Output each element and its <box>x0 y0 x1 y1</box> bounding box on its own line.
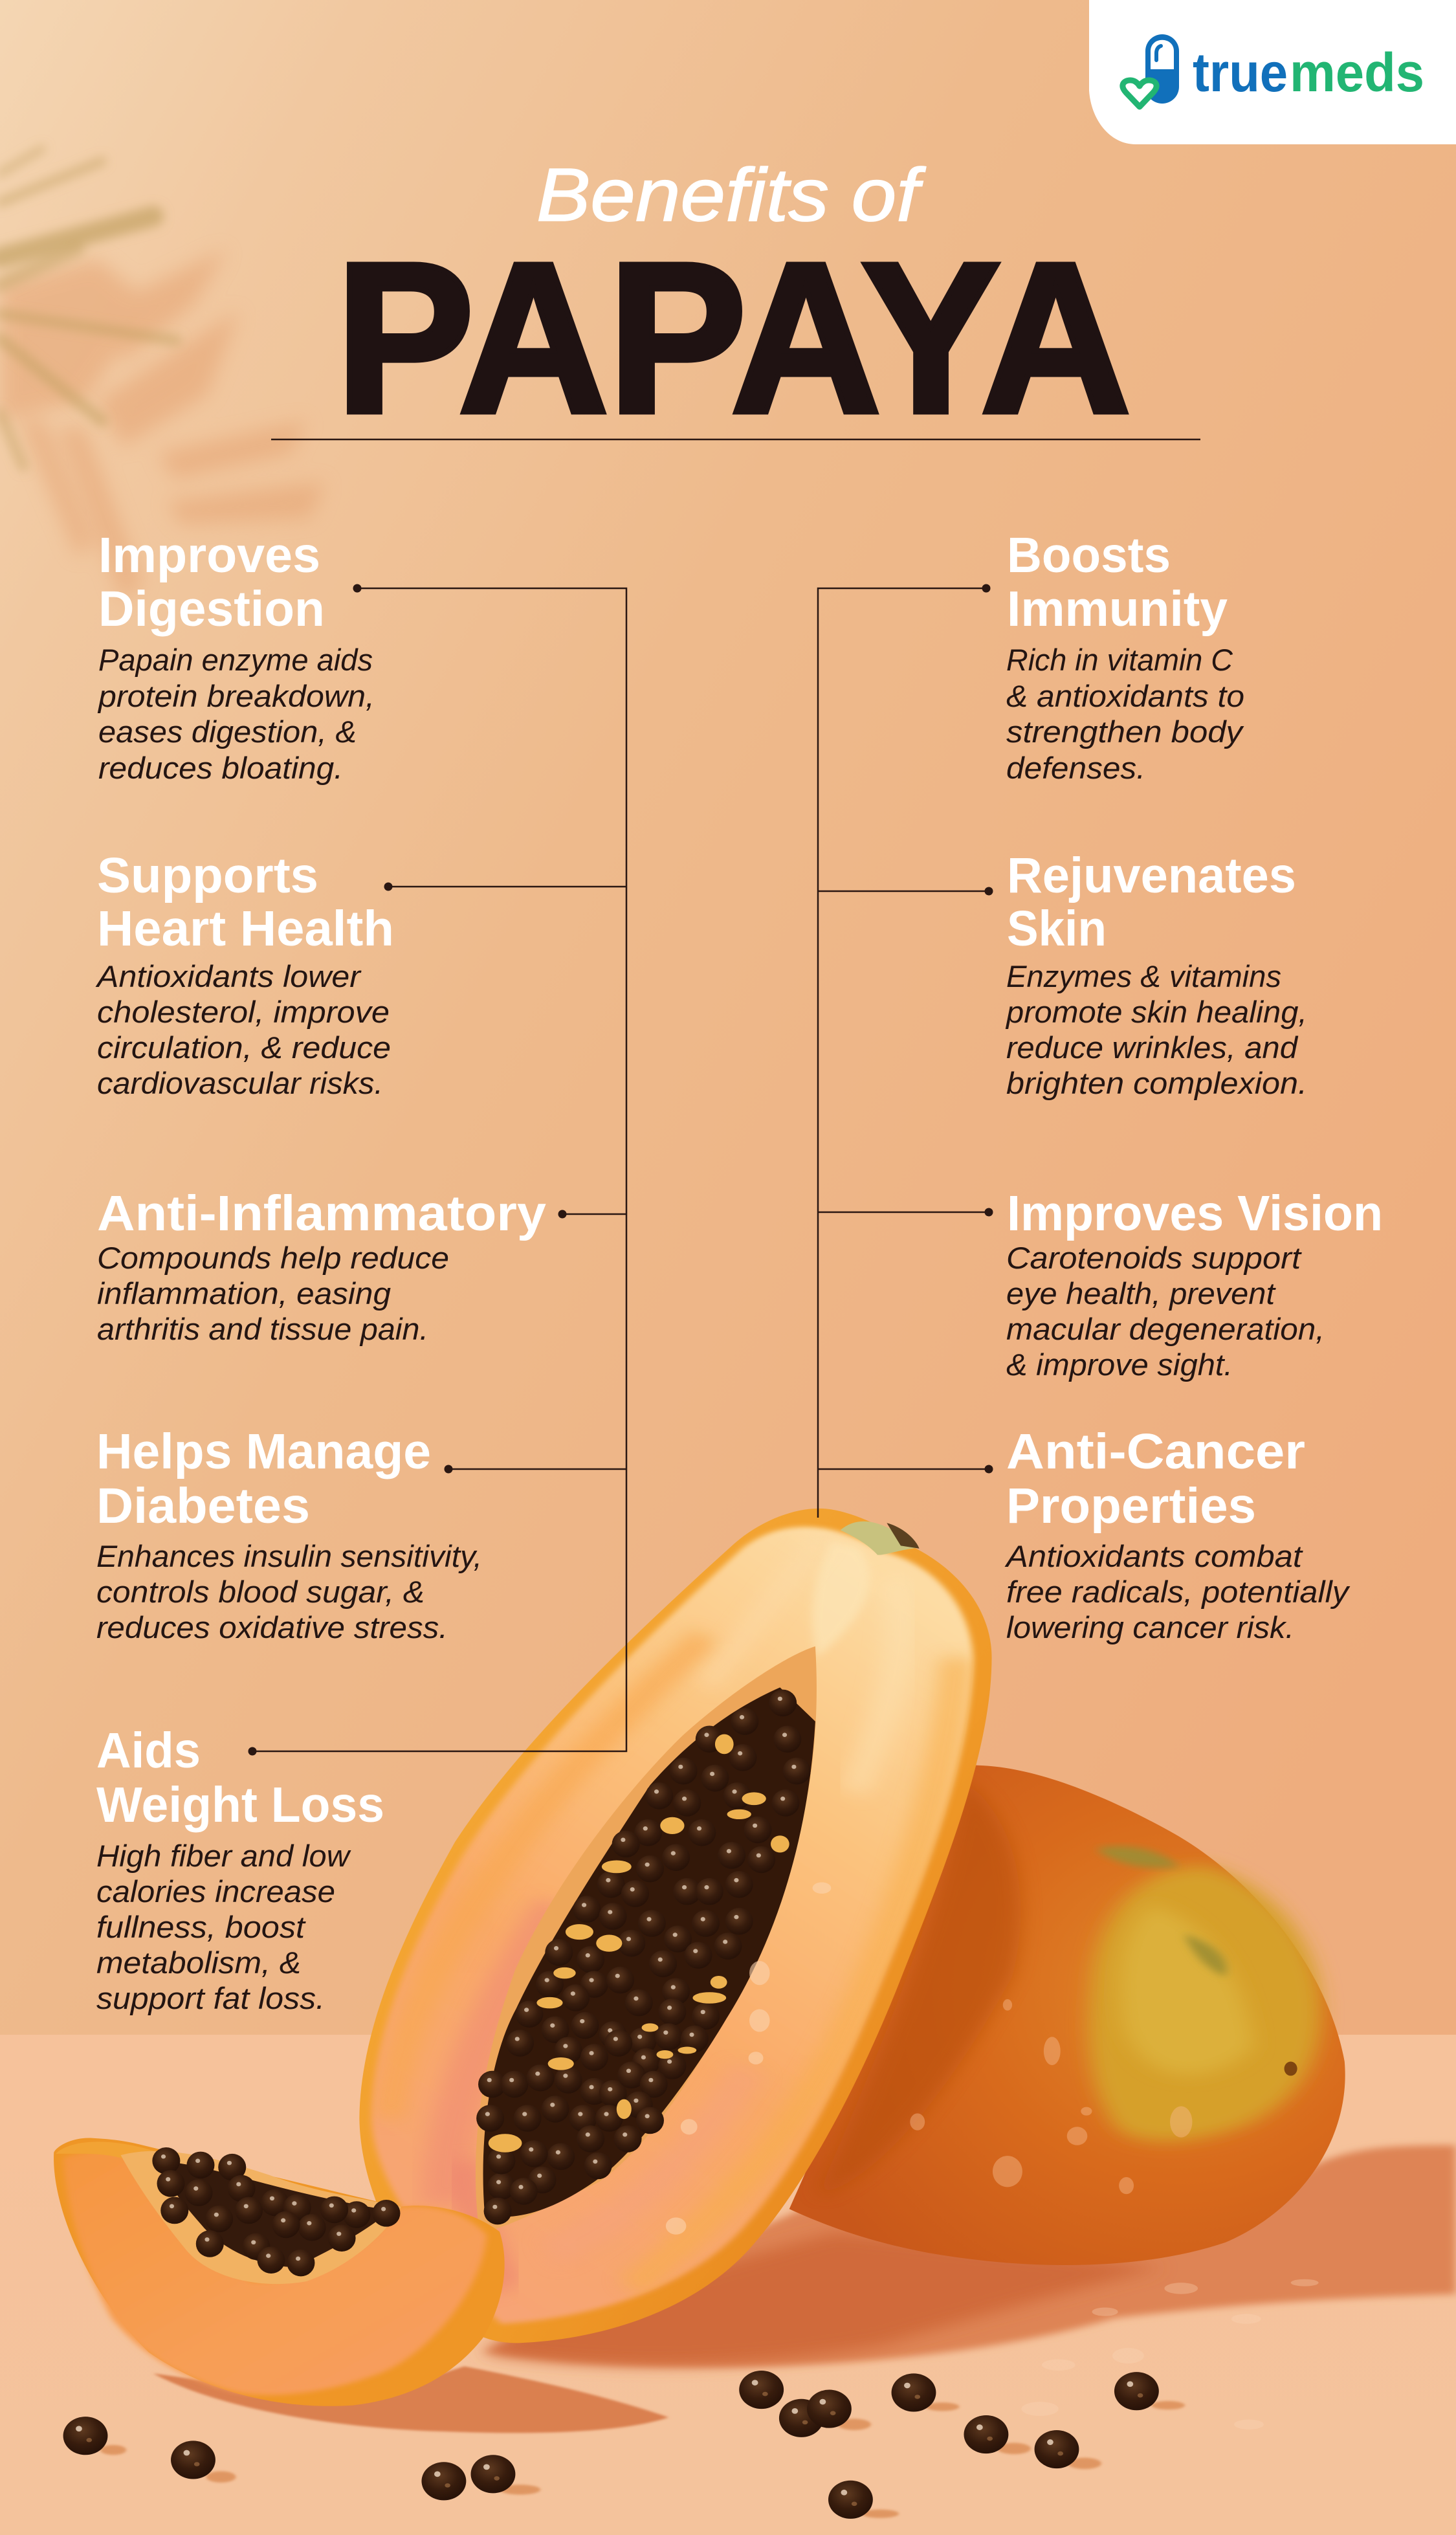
connector lines: right <box>818 584 993 1518</box>
logo wordmark: true <box>1193 42 1288 103</box>
benefit: rejuvenates skin: Rejuvenates <box>1007 848 1296 903</box>
logo wordmark: meds <box>1290 42 1424 103</box>
benefit: boosts immunity: & antioxidants to <box>1006 679 1244 713</box>
logo wordmark <box>1193 42 1424 103</box>
benefit: boosts immunity: Boosts <box>1007 527 1171 583</box>
benefit: anti-cancer properties: lowering cancer risk. <box>1006 1610 1294 1644</box>
yellow pulp pieces <box>489 1734 789 2153</box>
benefit: improves digestion: eases digestion, & <box>98 714 357 749</box>
benefit: improves vision: Carotenoids support <box>1006 1241 1302 1275</box>
flesh droplets <box>666 1882 831 2235</box>
benefit: improves vision: Improves Vision <box>1007 1186 1383 1241</box>
benefit: aids weight loss: support fat loss. <box>96 1981 325 2015</box>
benefit: helps manage diabetes <box>96 1424 482 1644</box>
papaya slice <box>54 2138 505 2406</box>
benefit: improves vision: macular degeneration, <box>1006 1312 1325 1346</box>
benefit: improves vision: & improve sight. <box>1006 1347 1233 1382</box>
benefit: anti-cancer properties: Antioxidants combat <box>1004 1539 1303 1573</box>
benefit: improves vision <box>1006 1186 1383 1382</box>
benefit: rejuvenates skin: promote skin healing, <box>1005 995 1307 1029</box>
benefit: supports heart health <box>95 848 394 1100</box>
benefit: rejuvenates skin: Enzymes & vitamins <box>1006 959 1281 993</box>
benefit: improves digestion: Digestion <box>98 581 325 637</box>
benefit: anti-cancer properties: free radicals, potentially <box>1006 1575 1351 1609</box>
fruit stem <box>841 1522 918 1555</box>
benefit: anti-cancer properties: Anti-Cancer <box>1006 1424 1305 1479</box>
benefit: rejuvenates skin: reduce wrinkles, and <box>1006 1030 1299 1065</box>
benefit: improves digestion <box>97 527 375 785</box>
flesh shading <box>390 1537 956 2288</box>
benefit: improves vision: eye health, prevent <box>1006 1276 1276 1311</box>
benefit: aids weight loss: fullness, boost <box>96 1910 306 1944</box>
benefit: rejuvenates skin: brighten complexion. <box>1006 1066 1307 1100</box>
benefit: aids weight loss: Aids <box>96 1723 201 1778</box>
benefit: anti-inflammatory <box>97 1186 546 1346</box>
slice seeds <box>152 2147 400 2276</box>
water droplets on skin <box>910 1999 1192 2194</box>
title: PAPAYA <box>336 218 1131 457</box>
benefit: rejuvenates skin <box>1005 848 1307 1100</box>
papaya illustration <box>54 1509 1345 2519</box>
benefit: boosts immunity <box>1006 527 1244 785</box>
benefit: supports heart health: Heart Health <box>97 901 394 957</box>
benefit: supports heart health: cardiovascular risks. <box>97 1066 383 1100</box>
benefit: improves digestion: Improves <box>98 527 320 583</box>
whole papaya <box>789 1766 1345 2265</box>
background floor <box>0 2035 1456 2535</box>
benefit: supports heart health: Antioxidants lower <box>95 959 362 993</box>
benefit: improves digestion: reduces bloating. <box>98 751 343 785</box>
benefit: rejuvenates skin: Skin <box>1007 901 1107 957</box>
benefit: anti-inflammatory: Compounds help reduce <box>97 1241 449 1275</box>
connector lines: left <box>248 584 626 1755</box>
benefit: boosts immunity: defenses. <box>1006 751 1145 785</box>
benefit: anti-cancer properties: Properties <box>1006 1478 1256 1534</box>
benefit: helps manage diabetes: reduces oxidative stress. <box>96 1610 448 1644</box>
floor shadows <box>153 2145 1456 2433</box>
benefit: boosts immunity: Immunity <box>1007 581 1228 637</box>
benefit: helps manage diabetes: Diabetes <box>96 1478 310 1534</box>
benefit: helps manage diabetes: Helps Manage <box>96 1424 431 1479</box>
benefit: anti-inflammatory: inflammation, easing <box>97 1276 391 1311</box>
benefit: aids weight loss: Weight Loss <box>96 1777 384 1833</box>
seed cavity <box>476 1646 817 2231</box>
benefit: improves digestion: protein breakdown, <box>97 679 375 713</box>
benefit: anti-cancer properties <box>1004 1424 1351 1644</box>
benefit: boosts immunity: Rich in vitamin C <box>1006 643 1233 677</box>
benefit: anti-inflammatory: arthritis and tissue pain. <box>97 1312 428 1346</box>
benefit: aids weight loss <box>96 1723 384 2015</box>
benefit: anti-inflammatory: Anti-Inflammatory <box>97 1186 546 1241</box>
benefit: aids weight loss: High fiber and low <box>96 1839 351 1873</box>
benefit: boosts immunity: strengthen body <box>1006 714 1244 749</box>
benefit: supports heart health: Supports <box>97 848 318 903</box>
benefit: aids weight loss: calories increase <box>96 1874 335 1909</box>
benefit: helps manage diabetes: controls blood sugar, & <box>96 1575 425 1609</box>
title: Benefits of <box>536 153 927 237</box>
palm leaf shadow <box>0 149 325 602</box>
benefit: supports heart health: cholesterol, improve <box>97 995 390 1029</box>
benefit: helps manage diabetes: Enhances insulin sensitivity, <box>96 1539 482 1573</box>
logo card <box>1089 0 1456 144</box>
icon: capsule and heart <box>1123 34 1179 107</box>
benefit: aids weight loss: metabolism, & <box>96 1945 301 1980</box>
half papaya <box>359 1509 992 2343</box>
benefit: improves digestion: Papain enzyme aids <box>98 643 373 677</box>
benefit: supports heart health: circulation, & reduce <box>97 1030 391 1065</box>
papaya seeds <box>476 1690 811 2224</box>
loose seeds on floor <box>63 2279 1319 2519</box>
